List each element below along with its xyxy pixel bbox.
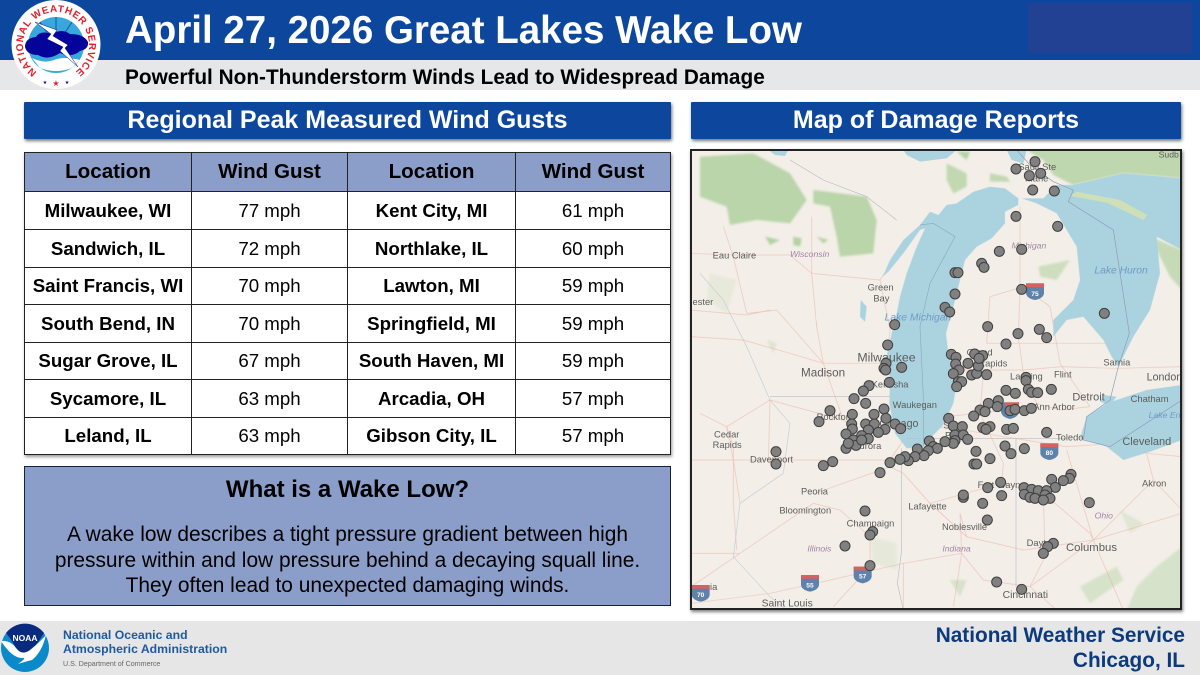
- map place labels: Kenosha: [872, 379, 909, 389]
- map place labels: ia: [710, 582, 718, 592]
- wake low description: pressure within and low pressure behind a decaying squall line.: [55, 548, 640, 572]
- map place labels: Lake Michigan: [885, 312, 952, 323]
- map place labels: Grand: [967, 347, 993, 357]
- map place labels: Bloomington: [779, 506, 831, 516]
- map place labels: Eau Claire: [713, 250, 756, 260]
- table: peak wind gusts: 77 mph: [238, 200, 301, 220]
- redacted header block: [1028, 3, 1192, 53]
- map place labels: Ann Arbor: [1033, 402, 1075, 412]
- map place labels: Rapids: [978, 359, 1008, 369]
- icon: National Weather Service logo: ★: [65, 80, 70, 86]
- map place labels: Cincinnati: [1003, 590, 1048, 601]
- map place labels: Wisconsin: [790, 249, 830, 259]
- icon: National Weather Service logo: ★: [52, 79, 60, 88]
- wake low heading: What is a Wake Low?: [226, 476, 469, 503]
- heading: regional peak measured wind gusts: Regional Peak Measured Wind Gusts: [127, 106, 568, 134]
- map place labels: Green: [868, 282, 894, 292]
- table: peak wind gusts: Saint Francis, WI: [33, 275, 183, 296]
- map place labels: Peoria: [801, 486, 829, 496]
- map place labels: Michigan: [1012, 241, 1046, 251]
- heading: regional peak measured wind gusts: [24, 102, 671, 139]
- map place labels: Akron: [1142, 479, 1166, 489]
- map place labels: Marie: [1025, 173, 1048, 183]
- table: peak wind gusts: Gibson City, IL: [366, 425, 497, 446]
- map place labels: Indiana: [942, 544, 971, 554]
- table: peak wind gusts: 57 mph: [562, 425, 624, 446]
- table: peak wind gusts: Lawton, MI: [383, 275, 480, 296]
- map place labels: Cedar: [714, 429, 739, 439]
- table: peak wind gusts: Location: [65, 160, 151, 183]
- map place labels: South: [943, 421, 968, 431]
- heading: map of damage reports: Map of Damage Reports: [793, 106, 1079, 134]
- NOAA agency name: [63, 628, 227, 656]
- table: peak wind gusts: Location: [389, 160, 474, 183]
- icon: National Weather Service logo: ★: [43, 80, 48, 86]
- table: peak wind gusts: Wind Gust: [542, 160, 644, 183]
- map place labels: Fort Wayne: [978, 480, 1026, 490]
- table: peak wind gusts: Sycamore, IL: [50, 388, 166, 408]
- interstate shields: 80: [1046, 450, 1053, 457]
- NOAA agency name: Atmospheric Administration: [63, 642, 227, 656]
- table: peak wind gusts: 61 mph: [562, 200, 624, 220]
- table: peak wind gusts: Sugar Grove, IL: [38, 350, 178, 371]
- icon: NOAA logo: [1, 624, 49, 672]
- table: peak wind gusts: Sandwich, IL: [51, 238, 165, 258]
- map place labels: Lake Huron: [1094, 265, 1148, 276]
- interstate shields: 75: [1031, 291, 1039, 298]
- table: peak wind gusts: 59 mph: [562, 312, 624, 334]
- map place labels: Davenport: [750, 455, 793, 465]
- table: peak wind gusts: 67 mph: [238, 350, 301, 371]
- map place labels: [687, 149, 1185, 610]
- Lake St. Clair and Lake Winnebago: [860, 300, 1117, 405]
- map place labels: Noblesville: [942, 522, 987, 532]
- table: peak wind gusts: South Haven, MI: [359, 350, 504, 371]
- office name: Chicago, IL: [1073, 648, 1185, 672]
- map place labels: Flint: [1054, 369, 1072, 379]
- table: peak wind gusts: Wind Gust: [218, 160, 321, 183]
- table: peak wind gusts: Northlake, IL: [375, 238, 488, 258]
- forest areas: [700, 150, 1182, 610]
- table: peak wind gusts: South Bend, IN: [41, 312, 175, 334]
- map place labels: Chatham: [1131, 394, 1169, 404]
- Lake Huron: [1022, 173, 1182, 367]
- Lake Michigan: [883, 187, 1018, 448]
- heading: map of damage reports: [691, 102, 1181, 139]
- table: peak wind gusts: Arcadia, OH: [378, 388, 485, 408]
- office name: National Weather Service: [936, 624, 1185, 647]
- Manitoulin Island: [1070, 192, 1147, 220]
- table: peak wind gusts: Springfield, MI: [367, 312, 496, 334]
- table: peak wind gusts: 57 mph: [562, 388, 624, 408]
- map place labels: Madison: [801, 366, 845, 379]
- map place labels: Lansing: [1010, 371, 1043, 381]
- footer band: [0, 621, 1200, 675]
- interstate shields: 57: [859, 574, 867, 581]
- map place labels: Detroit: [1072, 392, 1105, 404]
- map place labels: Columbus: [1066, 542, 1117, 554]
- subtitle band: [0, 60, 1200, 90]
- map place labels: Ohio: [1095, 510, 1113, 520]
- table: peak wind gusts: 72 mph: [238, 238, 301, 258]
- interstate shields: 70: [697, 592, 705, 599]
- table: peak wind gusts: [24, 152, 671, 455]
- title: April 27, 2026 Great Lakes Wake Low: [125, 9, 802, 52]
- header banner: [0, 0, 1200, 60]
- interstate shields: 55: [806, 582, 814, 589]
- roads: [691, 207, 1182, 610]
- map place labels: Aurora: [853, 441, 882, 451]
- table: peak wind gusts: 59 mph: [562, 275, 624, 296]
- office name: [936, 624, 1185, 672]
- map place labels: Illinois: [807, 543, 832, 553]
- table: peak wind gusts: Kent City, MI: [376, 200, 487, 220]
- map place labels: Dayton: [1027, 538, 1056, 548]
- table: peak wind gusts: 60 mph: [562, 238, 624, 258]
- map place labels: Sarnia: [1103, 358, 1131, 368]
- subtitle: Powerful Non-Thunderstorm Winds Lead to Widespread Damage: [125, 66, 765, 89]
- state and national borders: [700, 150, 1182, 610]
- map place labels: Lafayette: [908, 502, 947, 512]
- icon: NOAA logo: NOAA: [12, 633, 38, 643]
- map place labels: Cleveland: [1122, 436, 1171, 448]
- map place labels: Toledo: [1056, 433, 1084, 443]
- map place labels: Rapids: [713, 440, 742, 450]
- map place labels: Sault Ste: [1018, 162, 1056, 172]
- table: peak wind gusts: Milwaukee, WI: [45, 200, 171, 220]
- map place labels: Milwaukee: [857, 350, 916, 364]
- icon: National Weather Service logo: NATIONAL WEATHER SERVICE: [16, 5, 96, 77]
- table: peak wind gusts: 70 mph: [238, 275, 301, 296]
- NOAA agency name: National Oceanic and: [63, 628, 188, 642]
- Lake Superior: [768, 150, 1027, 163]
- interstate shields: [692, 283, 1058, 602]
- wake low description: They often lead to unexpected damaging winds.: [126, 574, 569, 597]
- map place labels: Chicago: [879, 418, 919, 430]
- table: peak wind gusts: 63 mph: [238, 388, 301, 408]
- panel: what is a wake low: [24, 466, 671, 606]
- map place labels: Bay: [873, 294, 890, 304]
- wake low description: [55, 523, 640, 597]
- map place labels: Champaign: [847, 518, 894, 528]
- map place labels: Bend: [945, 431, 967, 441]
- map of damage reports: [690, 149, 1182, 610]
- map base land: [690, 140, 1200, 623]
- table: peak wind gusts: Leland, IL: [64, 425, 152, 446]
- table: peak wind gusts: 70 mph: [238, 312, 301, 334]
- table: peak wind gusts: 59 mph: [562, 350, 624, 371]
- wake low description: A wake low describes a tight pressure gradient between high: [67, 523, 628, 546]
- table: peak wind gusts: 63 mph: [238, 425, 301, 446]
- damage report markers: [771, 157, 1109, 594]
- department of commerce: U.S. Department of Commerce: [63, 660, 160, 668]
- map place labels: Rockford: [817, 412, 854, 422]
- Lake Erie: [1080, 385, 1182, 460]
- map place labels: Waukegan: [893, 400, 937, 410]
